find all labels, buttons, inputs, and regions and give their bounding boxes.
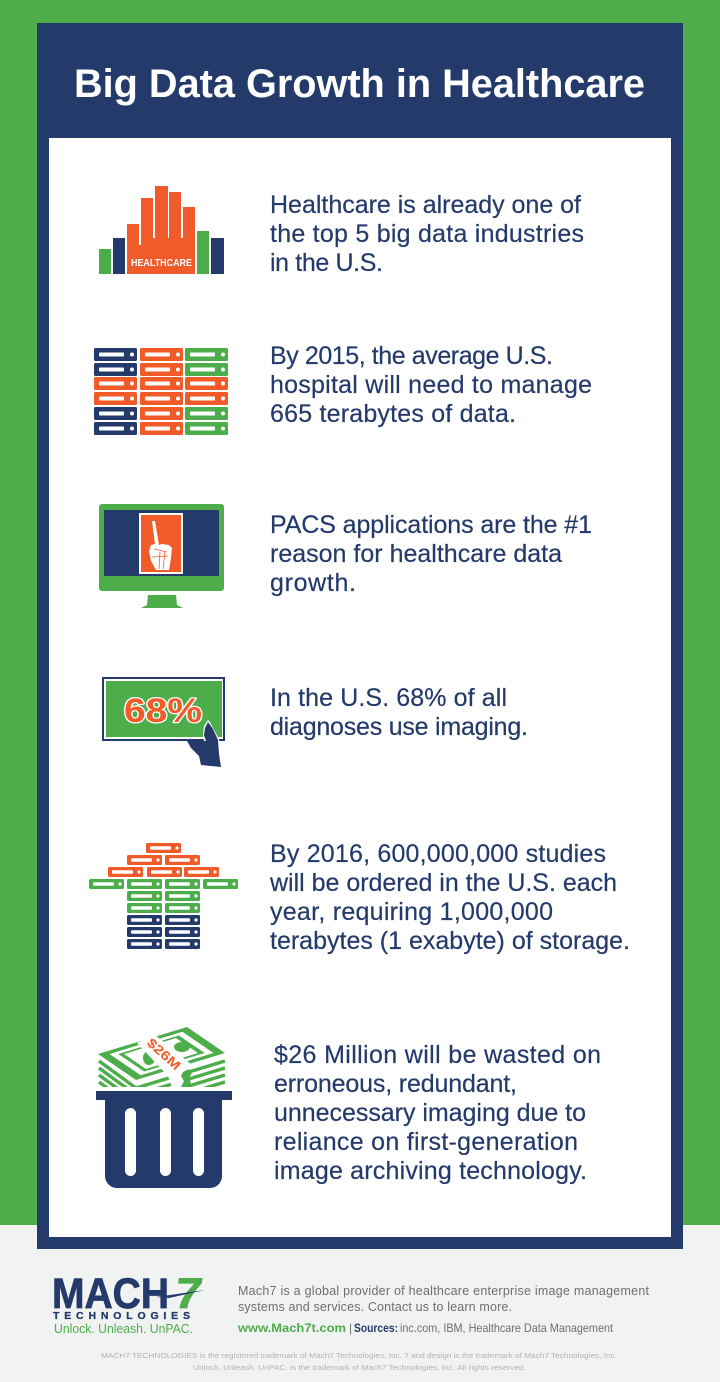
text: PACS applications: growth. bbox=[270, 569, 356, 597]
text: website and sources: inc.com, IBM, Healthcare Data Management bbox=[400, 1321, 614, 1335]
text: 600,000,000 studies: terabytes (1 exabyte) of storage. bbox=[270, 927, 630, 955]
title: Big Data Growth in Healthcare bbox=[74, 62, 645, 106]
text: 600,000,000 studies: By 2016, 600,000,000 studies bbox=[270, 840, 606, 868]
text: website and sources bbox=[237, 1321, 614, 1335]
text: 68% of diagnoses: In the U.S. 68% of all bbox=[270, 684, 507, 712]
text: $26 million wasted: image archiving technology. bbox=[274, 1157, 587, 1185]
text: company description: Mach7 is a global provider of healthcare enterprise image management bbox=[238, 1284, 650, 1298]
panel: main frame bbox=[37, 23, 683, 1249]
text: $26 million wasted: reliance on first-generation bbox=[274, 1128, 578, 1156]
text: company description bbox=[238, 1284, 650, 1314]
icon: money in trash can bbox=[96, 1027, 232, 1188]
text: trademark notice: MACH7 TECHNOLOGIES is the registered trademark of Mach7 Technologies, Inc. 7 and design is the trademark of Mach7 Technologies, Inc. bbox=[101, 1351, 617, 1360]
logo: Mach7 Technologies: Unlock. Unleash. UnPAC. bbox=[54, 1321, 193, 1336]
text: top 5 industries: in the U.S. bbox=[270, 249, 383, 277]
text: 600,000,000 studies bbox=[269, 840, 630, 955]
text: $26 million wasted: erroneous, redundant, bbox=[274, 1070, 517, 1098]
text: $26 million wasted: unnecessary imaging due to bbox=[274, 1099, 586, 1127]
logo: Mach7 Technologies: 7 bbox=[172, 1270, 205, 1318]
icon: healthcare hand bars: HEALTHCARE bbox=[131, 257, 192, 269]
icon: 68% touch screen bbox=[102, 677, 225, 769]
icon: server arrow stack bbox=[89, 843, 238, 949]
text: top 5 industries: the top 5 big data industries bbox=[270, 220, 584, 248]
logo: Mach7 Technologies bbox=[52, 1270, 205, 1336]
text: 665 terabytes: hospital will need to manage bbox=[270, 371, 592, 399]
text: website and sources: | bbox=[349, 1321, 352, 1335]
text: PACS applications: reason for healthcare data bbox=[270, 540, 562, 568]
logo: Mach7 Technologies: MACH bbox=[52, 1270, 169, 1318]
text: trademark notice bbox=[101, 1351, 617, 1372]
text: 600,000,000 studies: year, requiring 1,000,000 bbox=[270, 898, 553, 926]
icon: money in trash can: $26M bbox=[144, 1035, 184, 1073]
text: $26 million wasted: $26 Million will be wasted on bbox=[274, 1041, 601, 1069]
icon: healthcare hand bars bbox=[99, 186, 224, 274]
text: top 5 industries bbox=[270, 191, 584, 277]
text: 600,000,000 studies: will be ordered in the U.S. each bbox=[269, 869, 617, 897]
text: $26 million wasted bbox=[274, 1041, 601, 1185]
logo: Mach7 Technologies: TECHNOLOGIES bbox=[53, 1310, 190, 1322]
text: website and sources: www.Mach7t.com bbox=[237, 1321, 346, 1335]
text: 665 terabytes: By 2015, the average U.S. bbox=[270, 342, 553, 370]
text: top 5 industries: Healthcare is already one of bbox=[270, 191, 581, 219]
icon: 68% touch screen: 68% bbox=[124, 692, 202, 730]
text: 68% of diagnoses bbox=[270, 684, 528, 741]
text: website and sources: Sources: bbox=[354, 1321, 398, 1335]
text: 665 terabytes bbox=[270, 342, 592, 428]
icon: server grid bbox=[94, 348, 228, 435]
text: 68% of diagnoses: diagnoses use imaging. bbox=[270, 713, 528, 741]
text: PACS applications: PACS applications are the #1 bbox=[270, 511, 592, 539]
text: company description: systems and services. Contact us to learn more. bbox=[238, 1300, 512, 1314]
icon: monitor with x-ray bbox=[99, 504, 224, 608]
text: PACS applications bbox=[270, 511, 592, 597]
text: trademark notice: Unlock. Unleash. UnPAC. is the trademark of Mach7 Technologies, Inc. All rights reserved. bbox=[193, 1363, 526, 1372]
text: 665 terabytes: 665 terabytes of data. bbox=[270, 400, 516, 428]
